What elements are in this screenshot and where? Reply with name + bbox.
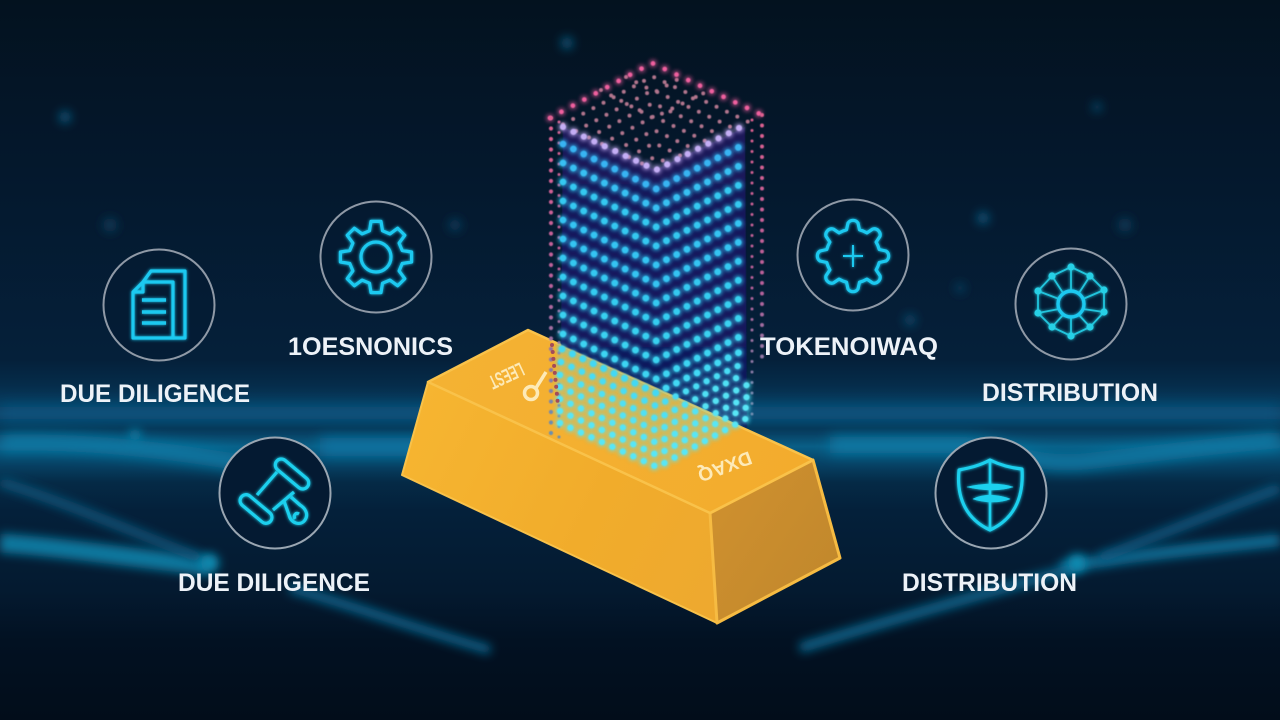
tower interior glow xyxy=(561,127,747,428)
tower dot rows xyxy=(560,125,747,467)
item: due diligence gavel xyxy=(178,438,370,597)
icon: document xyxy=(133,271,185,338)
label: 1OESNONICS xyxy=(288,333,453,361)
icon: gavel xyxy=(238,457,311,526)
label: DUE DILIGENCE xyxy=(178,569,370,597)
icon: shield xyxy=(959,460,1022,530)
ring xyxy=(798,200,908,310)
item: distribution network xyxy=(982,248,1158,407)
icon: network wheel xyxy=(1034,263,1108,340)
ring xyxy=(320,202,432,312)
gold bar right face xyxy=(710,460,840,623)
icon: gear xyxy=(340,221,412,293)
item: due diligence document xyxy=(60,250,250,408)
item: tokenomics gear xyxy=(288,202,453,361)
ring xyxy=(104,250,214,360)
label: DISTRIBUTION xyxy=(982,379,1158,407)
label: TOKENOIWAQ xyxy=(760,333,938,361)
icon: rounded gear with plus xyxy=(817,220,889,292)
label: DISTRIBUTION xyxy=(902,569,1077,597)
gold bar left face xyxy=(402,382,717,623)
tower left dark speckle over gold xyxy=(552,345,558,405)
ring xyxy=(1016,248,1126,360)
engraved text left: LEEST xyxy=(485,357,527,393)
label: DUE DILIGENCE xyxy=(60,380,250,408)
engraved key icon xyxy=(524,372,546,400)
item: tokenomics plus gear xyxy=(760,200,938,361)
ring xyxy=(936,438,1046,548)
engraved text right: DXAQ xyxy=(695,446,754,485)
tower side edges xyxy=(551,115,762,440)
tower top grid xyxy=(563,76,749,164)
tower pink top edges xyxy=(550,63,762,118)
ring xyxy=(220,438,330,548)
item: distribution shield xyxy=(902,438,1077,597)
gold bar top face xyxy=(428,330,813,513)
gold bar xyxy=(402,330,840,623)
digital tower of dots xyxy=(550,63,762,467)
